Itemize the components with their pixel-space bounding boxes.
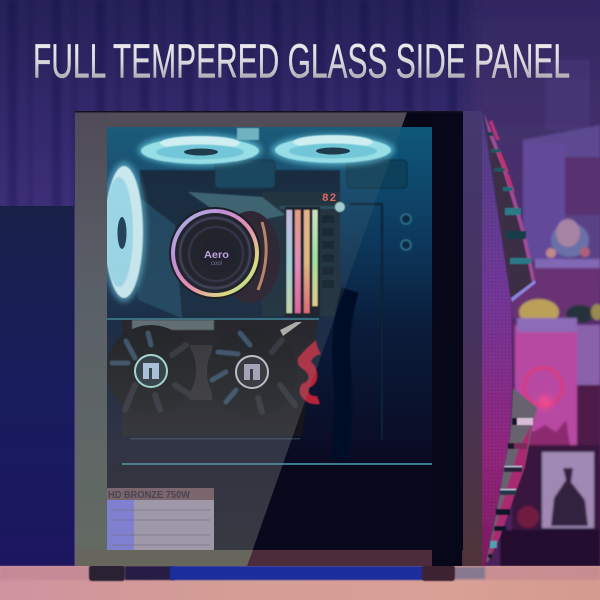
pink ring decoration — [524, 368, 562, 409]
red dragon emblem — [298, 340, 321, 404]
motherboard — [130, 160, 411, 460]
CPU cooler: cool — [211, 261, 222, 267]
debug LED: 82 — [322, 193, 337, 205]
table surface — [0, 566, 600, 600]
cooler logo text: Aero — [204, 250, 229, 261]
yellow plush toy — [519, 299, 600, 325]
background: dark box left — [0, 206, 74, 568]
fin cluster upper — [484, 113, 536, 302]
GPU hub left — [135, 355, 167, 387]
GPU hub right — [236, 356, 268, 388]
mesh side panel — [482, 112, 512, 566]
plush toy on shelf — [546, 219, 590, 258]
PSU label — [107, 488, 214, 550]
background: room shelves and decor — [470, 0, 600, 580]
glass side panel — [75, 112, 463, 566]
interior backdrop — [107, 127, 432, 465]
GPU — [106, 318, 432, 465]
RAM sticks — [285, 207, 320, 317]
PSU section — [107, 466, 432, 550]
fin cluster lower — [486, 388, 537, 562]
framed poster — [540, 450, 596, 530]
top fans — [138, 128, 395, 166]
reflection overlay — [107, 127, 402, 550]
glass frosted border — [75, 112, 463, 566]
glass base black — [107, 112, 463, 550]
case top edge — [75, 111, 463, 112]
case feet — [89, 565, 455, 581]
left fan — [102, 162, 146, 302]
CPU cooler — [169, 207, 280, 303]
PSU label: HD BRONZE 750W — [108, 490, 191, 501]
front panel strip — [462, 111, 482, 566]
